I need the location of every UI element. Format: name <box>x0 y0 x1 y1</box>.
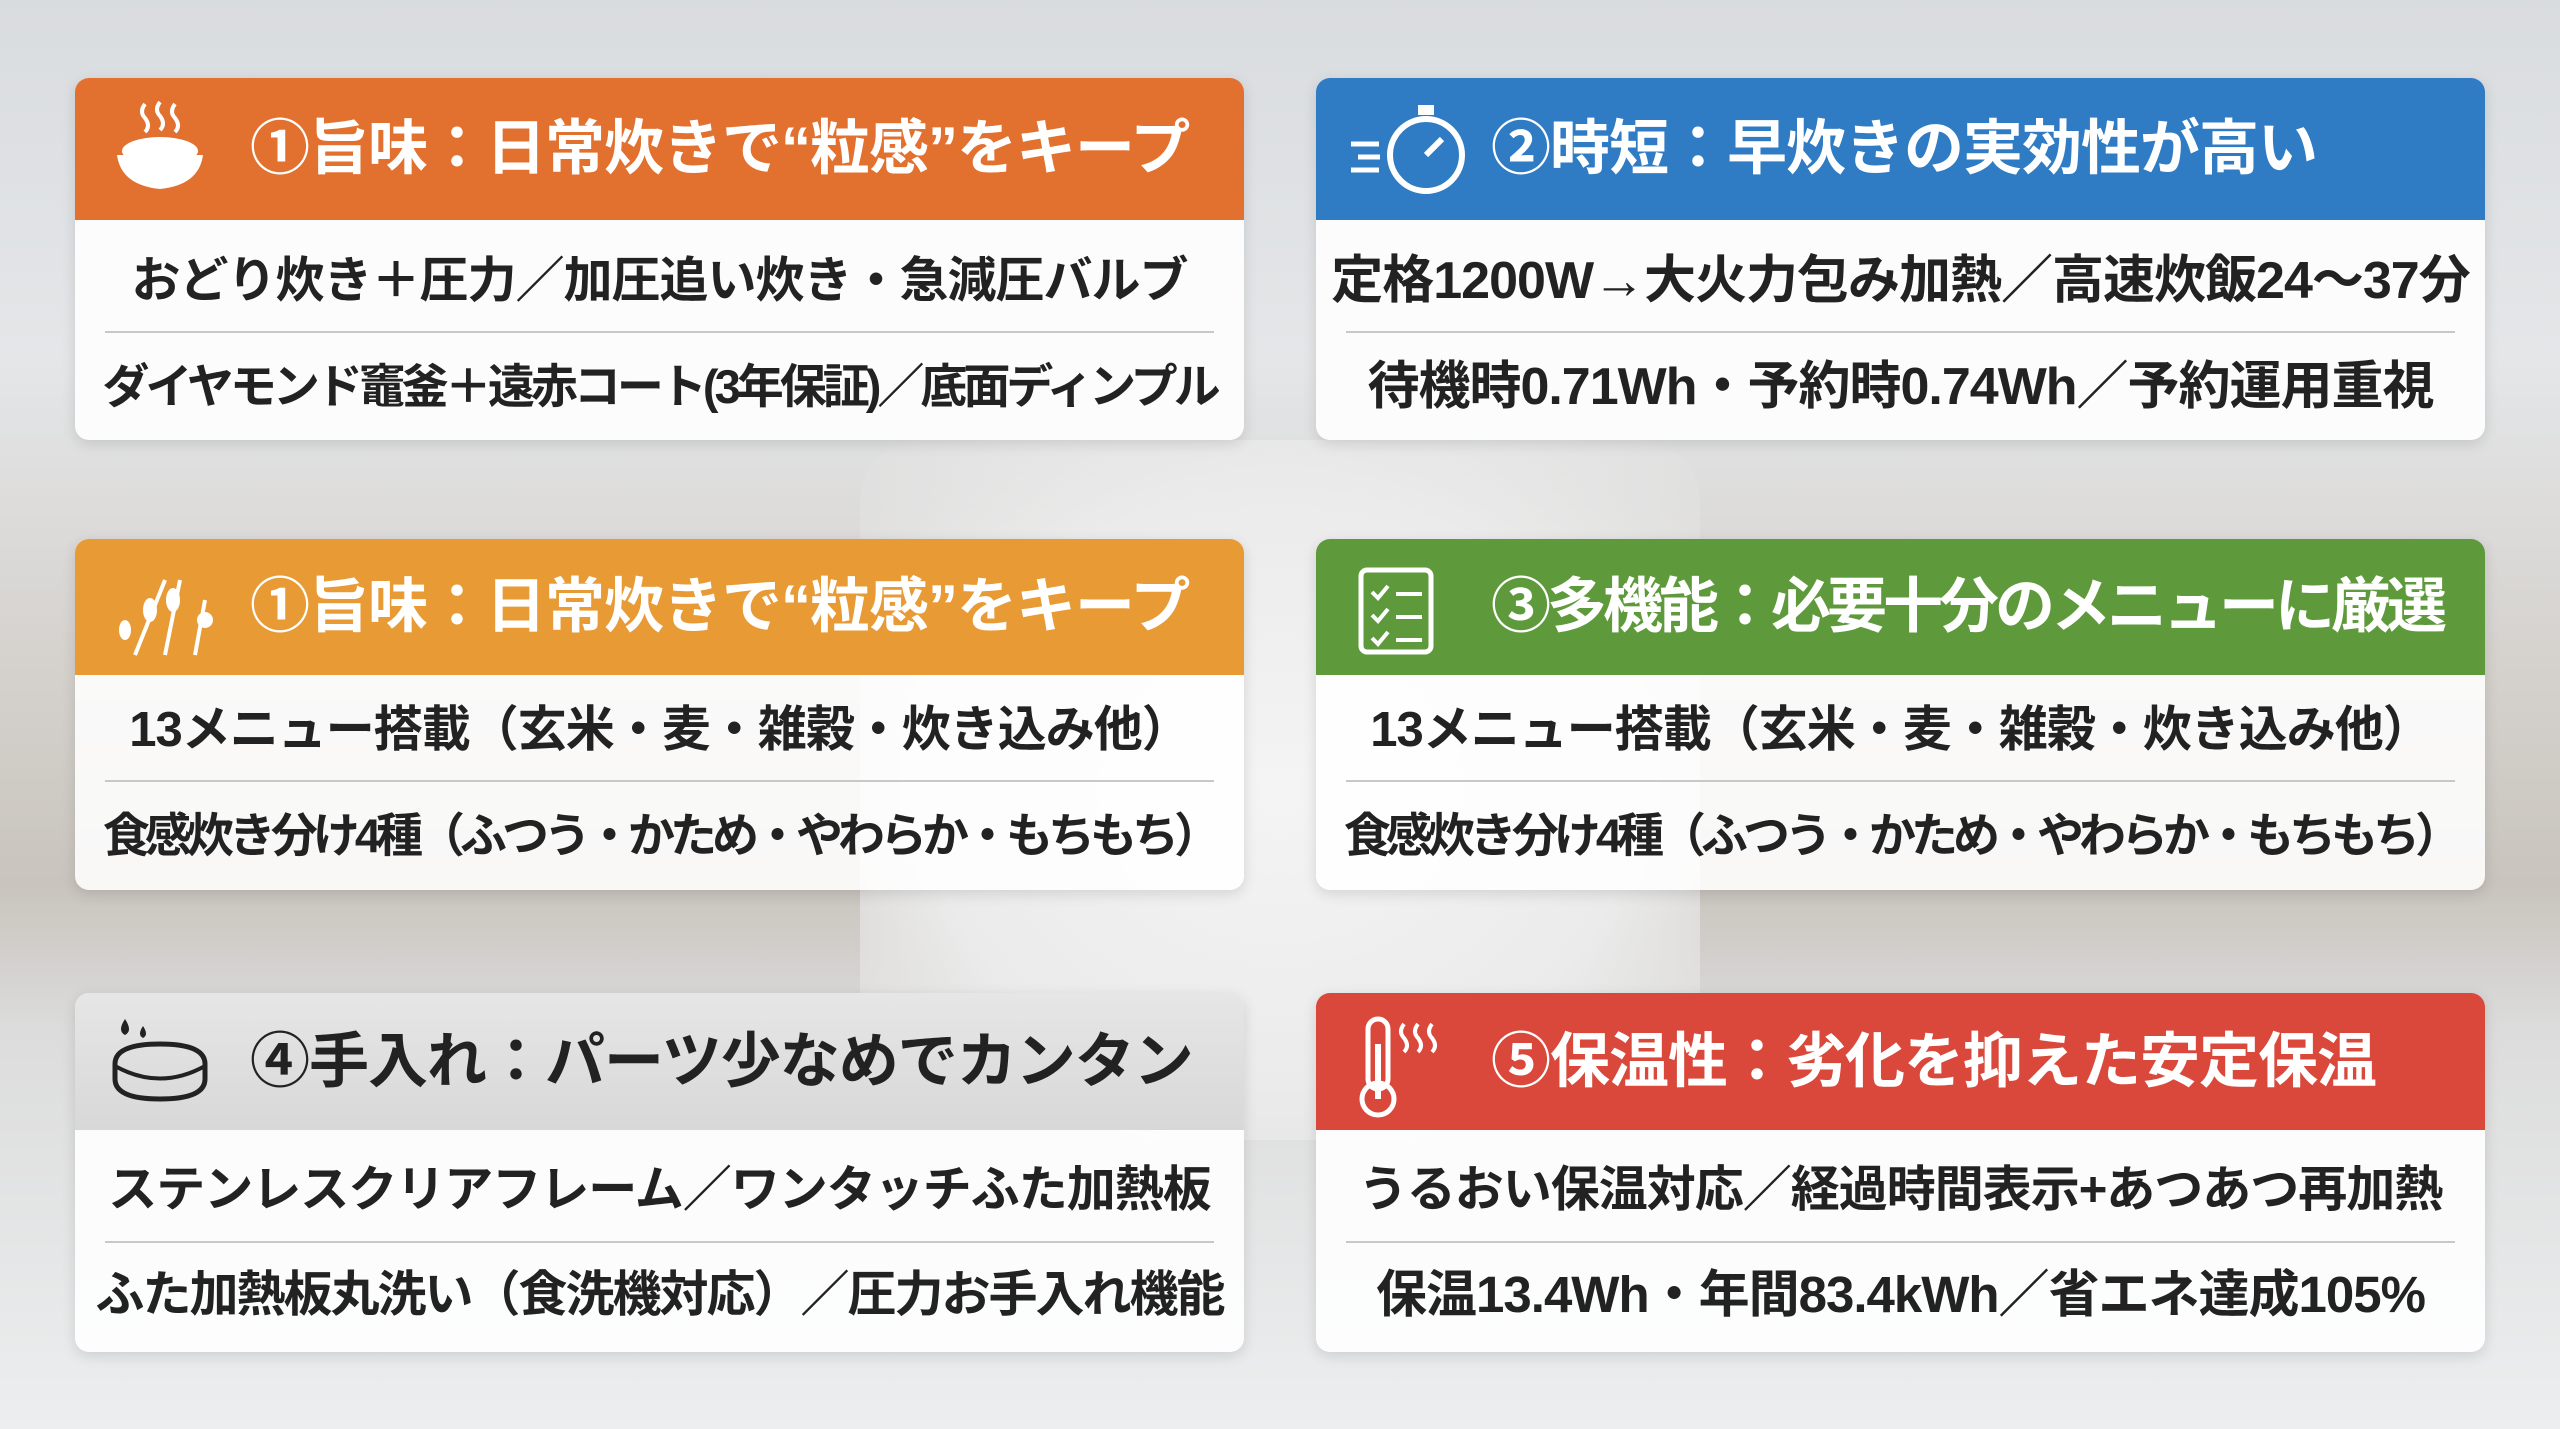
icon: rice bowl <box>117 100 203 189</box>
panel: jitan 2: 待機時0.71Wh・予約時0.74Wh／予約運用重視 <box>1367 358 2434 416</box>
header green <box>1316 539 2485 675</box>
icon: thermometer <box>1360 1016 1438 1118</box>
icon: checklist <box>1358 568 1434 654</box>
icon: stopwatch <box>1351 105 1465 194</box>
header blue <box>1316 78 2485 220</box>
panel: umami 1 <box>75 78 1244 440</box>
panel: multi 3 <box>1316 539 2485 890</box>
panel: umami 1: おどり炊き＋圧力／加圧追い炊き・急減圧バルブ <box>131 254 1188 308</box>
panel: umami 1: ダイヤモンド竈釜＋遠赤コート(3年保証)／底面ディンプル <box>102 360 1217 413</box>
panel: jitan 2: 定格1200W→大火力包み加熱／高速炊飯24～37分 <box>1331 252 2470 310</box>
panel: teire 4: ふた加熱板丸洗い（食洗機対応）／圧力お手入れ機能 <box>95 1268 1224 1322</box>
icon: sponge <box>112 1019 208 1102</box>
panel: multi 3: 13メニュー搭載（玄米・麦・雑穀・炊き込み他） <box>1370 703 2431 757</box>
header orange <box>75 78 1244 220</box>
panel: hoon 5 <box>1316 993 2485 1352</box>
panel: umami repeat: 13メニュー搭載（玄米・麦・雑穀・炊き込み他） <box>129 703 1190 757</box>
header gray <box>75 993 1244 1130</box>
header gray: ④手入れ：パーツ少なめでカンタン <box>250 1028 1193 1095</box>
panel: jitan 2 <box>1316 78 2485 440</box>
header green: ③多機能：必要十分のメニューに厳選 <box>1491 573 2443 640</box>
panel: umami repeat <box>75 539 1244 890</box>
panel: teire 4 <box>75 993 1244 1352</box>
header amber: ①旨味：日常炊きで“粒感”をキープ <box>250 573 1189 640</box>
panel: hoon 5: うるおい保温対応／経過時間表示+あつあつ再加熱 <box>1359 1163 2442 1217</box>
panel: hoon 5: 保温13.4Wh・年間83.4kWh／省エネ達成105% <box>1376 1266 2425 1323</box>
icon: grains <box>119 579 213 656</box>
panel: umami repeat: 食感炊き分け4種（ふつう・かため・やわらか・もちもち） <box>103 809 1216 862</box>
header blue: ②時短：早炊きの実効性が高い <box>1491 115 2317 182</box>
header orange: ①旨味：日常炊きで“粒感”をキープ <box>250 115 1189 182</box>
panel: multi 3: 食感炊き分け4種（ふつう・かため・やわらか・もちもち） <box>1344 809 2457 862</box>
panel: teire 4: ステンレスクリアフレーム／ワンタッチふた加熱板 <box>108 1163 1211 1217</box>
header amber <box>75 539 1244 675</box>
header red <box>1316 993 2485 1130</box>
header red: ⑤保温性：劣化を抑えた安定保温 <box>1491 1028 2376 1095</box>
